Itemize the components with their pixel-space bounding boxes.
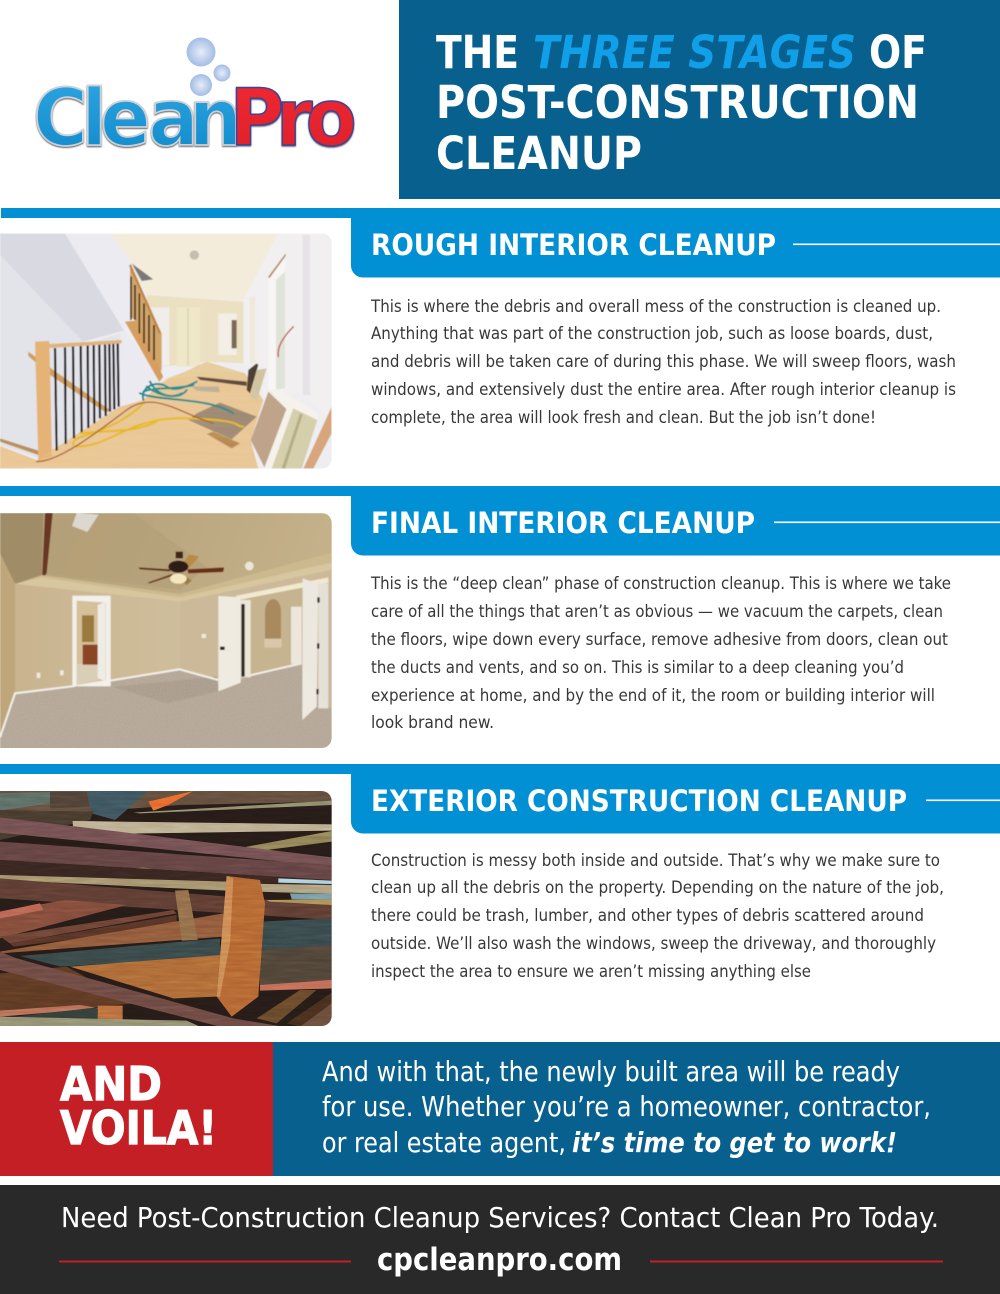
body text: This is the “deep clean” phase of construction cleanup. This is where we take [370, 574, 951, 593]
logo wordmark: Clean [33, 72, 242, 163]
body text: and debris will be taken care of during this phase. We will sweep floors, wash [371, 352, 956, 371]
heading: EXTERIOR CONSTRUCTION CLEANUP [371, 784, 907, 818]
body text: Construction is messy both inside and outside. That’s why we make sure to [371, 851, 940, 870]
section band [0, 764, 1000, 834]
heading: FINAL INTERIOR CLEANUP [371, 506, 755, 540]
white doors [218, 596, 241, 691]
photo: finished bedroom [0, 513, 333, 750]
leaning panels [251, 392, 287, 469]
body text: This is where the debris and overall mess of the construction is cleaned up. [370, 297, 941, 316]
body text [371, 851, 944, 981]
photo: lumber pile [0, 791, 333, 1028]
panel: final interior cleanup [0, 486, 1000, 750]
debris and cables [188, 403, 257, 439]
body text: complete, the area will look fresh and clean. But the job isn’t done! [371, 408, 876, 427]
body text: experience at home, and by the end of it, the room or building interior will [371, 686, 935, 705]
heading: ROUGH INTERIOR CLEANUP [371, 228, 776, 262]
body text: inspect the area to ensure we aren’t missing anything else [371, 962, 811, 981]
title: OF [869, 26, 927, 79]
body text: care of all the things that aren’t as obvious — we vacuum the carpets, clean [371, 602, 943, 621]
header [33, 0, 1000, 199]
panel: and voila callout [0, 1042, 1000, 1176]
body text: Anything that was part of the construction job, such as loose boards, dust, [371, 324, 933, 343]
panel: rough interior cleanup [0, 208, 1000, 470]
railing [28, 352, 110, 413]
body text: windows, and extensively dust the entire area. After rough interior cleanup is [371, 380, 956, 399]
logo [33, 38, 357, 163]
title panel [399, 0, 1000, 199]
title: THE [436, 26, 519, 79]
body text: look brand new. [371, 713, 494, 732]
body text: the floors, wipe down every surface, remove adhesive from doors, clean out [371, 630, 948, 649]
red callout block [0, 1042, 273, 1176]
title [436, 26, 927, 180]
icon: bubbles [186, 38, 230, 96]
section band [1, 208, 1000, 278]
body text [370, 297, 956, 427]
website: cpcleanpro.com [377, 1242, 622, 1278]
call to action: Need Post-Construction Cleanup Services? Contact Clean Pro Today. [61, 1201, 939, 1234]
message text [322, 1056, 931, 1159]
stairs [125, 263, 162, 375]
section band [0, 486, 1000, 556]
body text: the ducts and vents, and so on. This is similar to a deep cleaning you’d [371, 658, 904, 677]
voila heading: AND [60, 1057, 162, 1111]
body text: clean up all the debris on the property. Depending on the nature of the job, [371, 878, 944, 897]
doorway to bathroom [72, 596, 111, 686]
message text: or real estate agent, [322, 1127, 566, 1159]
blue message block [273, 1042, 1000, 1176]
voila heading [60, 1057, 217, 1155]
body text: there could be trash, lumber, and other types of debris scattered around [371, 906, 924, 925]
body text: outside. We’ll also wash the windows, sweep the driveway, and thoroughly [371, 934, 936, 953]
title: CLEANUP [436, 127, 642, 180]
voila heading: VOILA! [60, 1101, 217, 1155]
logo wordmark: Pro [230, 72, 357, 163]
panel: exterior construction cleanup [0, 764, 1000, 1028]
body text [370, 574, 951, 732]
message text: for use. Whether you’re a homeowner, contractor, [322, 1091, 931, 1123]
footer [0, 1185, 1000, 1294]
floor [0, 362, 263, 469]
logo wordmark [33, 72, 357, 163]
title: THREE STAGES [533, 26, 856, 79]
ceiling fan [138, 552, 224, 585]
title: POST-CONSTRUCTION [436, 76, 919, 129]
message text: And with that, the newly built area will be ready [322, 1056, 900, 1088]
photo: unfinished hallway [0, 233, 333, 470]
message text: it’s time to get to work! [572, 1127, 897, 1159]
